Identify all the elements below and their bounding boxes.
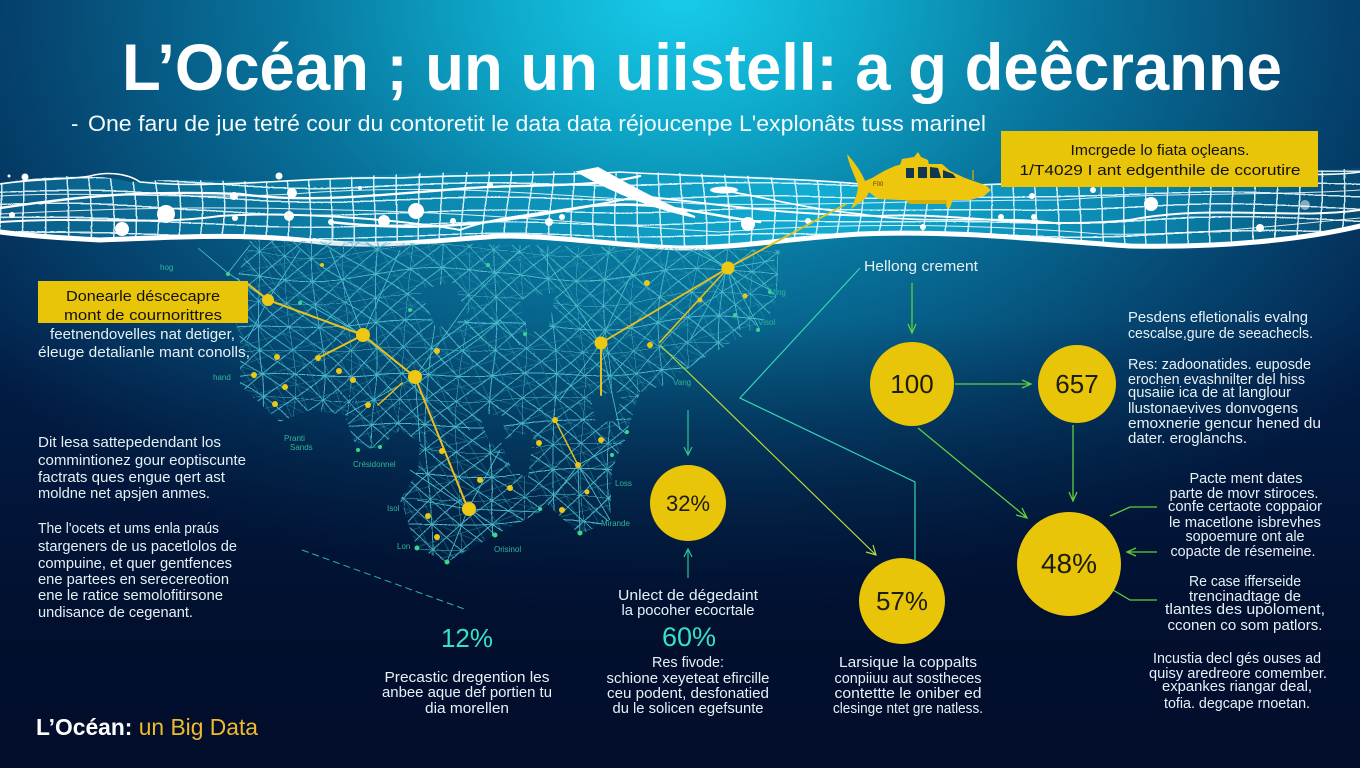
stat 60%: schione xeyeteat efircille	[606, 671, 770, 687]
arrows to 32%	[684, 410, 692, 578]
title: L’Océan ; un un uiistell: a g deêcranne	[122, 30, 1282, 104]
small place labels: Orisinol	[494, 545, 521, 554]
yellow callout: top right: Imcrgede lo fiata oçleans.	[1070, 142, 1250, 159]
stat 100 circle	[870, 342, 954, 426]
small place labels: hand	[213, 373, 231, 382]
stat 12%: 12%	[441, 623, 493, 653]
right text block 5	[1149, 651, 1327, 712]
stat 60%	[606, 588, 770, 717]
stat 60%: du le solicen egefsunte	[612, 701, 764, 717]
green nodes	[195, 263, 772, 564]
right text block 2: emoxnerie gencur hened du	[1128, 416, 1321, 432]
left text block 2: undisance de cegenant.	[38, 605, 193, 621]
stat 60%: 60%	[662, 622, 716, 652]
flow label: Hellong crement	[864, 259, 978, 275]
small place labels: Sands	[290, 443, 313, 452]
submarine	[847, 152, 991, 209]
stat 100 circle: 100	[890, 369, 934, 399]
small place labels: Pranti	[284, 434, 305, 443]
stat 60%: la pocoher ecocrtale	[622, 603, 754, 619]
yellow callout: top right	[1001, 131, 1318, 187]
right text block 1: Pesdens efletionalis evalng	[1128, 310, 1308, 326]
yellow nodes	[251, 262, 748, 540]
stat 48% circle	[1017, 512, 1121, 616]
logo: L’Océan: un Big Data	[36, 714, 258, 740]
left text block 2: ene le ratice semolofitirsone	[38, 588, 223, 604]
left text block 2: stargeners de us pacetlolos de	[38, 539, 237, 555]
stat 57% caption: Larsique la coppalts	[839, 655, 977, 671]
right text block 4: Re case ifferseide	[1189, 574, 1301, 590]
right text block 4: cconen co som patlors.	[1168, 618, 1322, 634]
connector lines	[660, 268, 915, 560]
small place labels: Mirande	[601, 519, 630, 528]
right text block 2: dater. eroglanchs.	[1128, 431, 1247, 447]
small place labels: Lon	[397, 542, 410, 551]
stat 57% caption: conpiiuu aut sostheces	[834, 671, 982, 687]
right text block 3: copacte de résemeine.	[1170, 544, 1316, 560]
yellow callout: left: mont de cournorittres	[64, 307, 222, 324]
left text block 1: factrats ques engue qert ast	[38, 470, 225, 486]
right text block 4: trencinadtage de	[1189, 589, 1301, 605]
small place labels: Visol	[758, 318, 775, 327]
small place labels: Ving	[770, 288, 786, 297]
stat 60%: ceu podent, desfonatied	[607, 686, 769, 702]
yellow links	[248, 204, 846, 509]
left caption: feetnendovelles nat detiger,	[50, 327, 235, 343]
data bubbles	[8, 172, 1310, 236]
right text block 3: sopoemure ont ale	[1186, 529, 1304, 545]
left text block 2	[38, 521, 237, 621]
right text block 1: cescalse,gure de seeachecls.	[1128, 326, 1313, 342]
subtitle: One faru de jue tetré cour du contoretit le data data réjoucenpe L'explonâts tuss marinel	[88, 111, 986, 136]
right text block 3: confe certaote coppaior	[1168, 499, 1322, 515]
stat 32% circle: 32%	[666, 491, 710, 516]
yellow callout: left	[38, 281, 248, 324]
yellow callout: top right: 1/T4029 I ant edgenthile de ccorutire	[1020, 162, 1300, 179]
right text block 1	[1128, 310, 1313, 342]
stat 657 circle	[1038, 345, 1116, 423]
left text block 2: ene partees en serecereotion	[38, 572, 229, 588]
flow arrows	[908, 283, 1157, 600]
left caption	[38, 327, 250, 361]
wave data band	[0, 167, 1360, 250]
stat 12%	[382, 623, 552, 717]
right text block 2: qusaiie ica de at langlour	[1128, 385, 1291, 401]
dashed leader line	[302, 550, 467, 610]
left text block 1: moldne net apsjen anmes.	[38, 486, 210, 502]
left caption: éleuge detalianle mant conolls,	[38, 345, 250, 361]
submarine: F00	[873, 182, 884, 188]
mesh links	[198, 245, 775, 562]
stat 60%: Res fivode:	[652, 655, 724, 671]
small place labels: Loss	[615, 479, 632, 488]
left text block 1	[38, 435, 246, 502]
right text block 5: tofia. degcape rnoetan.	[1164, 696, 1310, 712]
right text block 2	[1128, 357, 1321, 447]
small place labels	[160, 263, 786, 554]
right text block 3: le macetlone isbrevhes	[1169, 515, 1321, 531]
right text block 2: Res: zadoonatides. euposde	[1128, 357, 1311, 373]
stat 12%: dia morellen	[425, 701, 509, 717]
left text block 2: compuine, et quer gentfences	[38, 556, 232, 572]
right text block 4	[1165, 574, 1325, 634]
left text block 1: Dit lesa sattepedendant los	[38, 435, 221, 451]
stat 12%: Precastic dregention les	[384, 670, 550, 686]
stat 57% circle: 57%	[876, 586, 928, 616]
left text block 1: commintionez gour eoptiscunte	[38, 453, 246, 469]
right text block 5: quisy aredreore comember.	[1149, 666, 1327, 682]
wave lines	[0, 168, 1360, 248]
stat 57% caption	[833, 655, 983, 717]
right text block 5: Incustia decl gés ouses ad	[1153, 651, 1321, 667]
stat 12%: anbee aque def portien tu	[382, 685, 552, 701]
left text block 2: The l'ocets et ums enla praús	[38, 521, 219, 537]
small place labels: hog	[160, 263, 173, 272]
right text block 3: parte de movr stiroces.	[1170, 486, 1318, 502]
right text block 3	[1168, 471, 1322, 560]
subtitle: -	[71, 111, 78, 136]
small place labels: Crésidonnel	[353, 460, 396, 469]
right text block 2: erochen evashnilter del hiss	[1128, 372, 1305, 388]
stat 657 circle: 657	[1055, 369, 1099, 399]
stat 57% caption: contettte le oniber ed	[834, 686, 982, 702]
stat 32% circle	[650, 465, 726, 541]
right text block 3: Pacte ment dates	[1190, 471, 1302, 487]
stat 48% circle: 48%	[1041, 548, 1097, 579]
right text block 2: llustonaevives donvogens	[1128, 401, 1298, 417]
right text block 4: tlantes des upoloment,	[1165, 602, 1325, 618]
network map	[160, 204, 846, 600]
stat 57% caption: clesinge ntet gre natless.	[833, 701, 983, 717]
right text block 5: expankes riangar deal,	[1162, 679, 1312, 695]
stat 57% circle	[859, 558, 945, 644]
yellow callout: left: Donearle déscecapre	[66, 288, 220, 305]
small place labels: Isol	[387, 504, 400, 513]
stat 60%: Unlect de dégedaint	[618, 588, 758, 604]
small place labels: Vang	[673, 378, 691, 387]
